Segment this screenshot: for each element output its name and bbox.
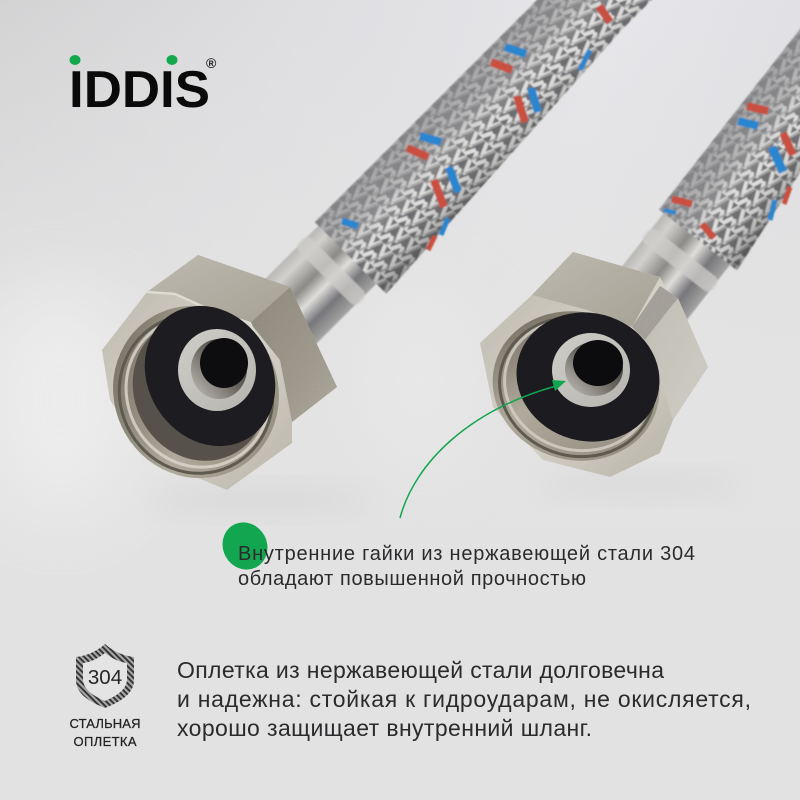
description text: хорошо защищает внутренний шланг. bbox=[177, 715, 592, 741]
steel ring bbox=[178, 329, 256, 411]
nut top face bbox=[147, 255, 290, 323]
callout text: обладают повышенной прочностью bbox=[238, 568, 586, 590]
description text bbox=[177, 657, 751, 741]
description text: Оплетка из нержавеющей стали долговечна bbox=[177, 657, 664, 683]
green dot marker bbox=[214, 514, 276, 578]
nut silhouette and front rim bbox=[480, 252, 708, 477]
nut thread opening bbox=[85, 278, 307, 506]
black gasket bbox=[119, 281, 301, 471]
photo: left braided hose bbox=[250, 0, 682, 359]
nut top face bbox=[532, 252, 660, 327]
logo: IDDIS: ® bbox=[206, 55, 217, 71]
callout text bbox=[238, 543, 695, 590]
nut side face bbox=[645, 298, 708, 420]
badge: 304 steel braid bbox=[70, 644, 140, 749]
photo: left nut bbox=[85, 255, 337, 506]
badge caption: СТАЛЬНАЯ bbox=[70, 716, 140, 731]
nut silhouette and front rim bbox=[102, 255, 337, 490]
badge caption bbox=[70, 716, 140, 749]
nut grainy facet bbox=[632, 286, 678, 340]
nut thread opening bbox=[476, 293, 676, 479]
black gasket bbox=[502, 297, 674, 457]
nut edge highlight bbox=[147, 292, 260, 345]
bore bbox=[191, 339, 247, 399]
photo: right braided hose bbox=[607, 0, 800, 337]
bore bbox=[565, 342, 623, 396]
callout text: Внутренние гайки из нержавеющей стали 304 bbox=[238, 543, 695, 565]
badge caption: ОПЛЕТКА bbox=[74, 734, 137, 749]
logo: IDDIS: IDDIS bbox=[69, 61, 210, 119]
nut side face bbox=[250, 287, 337, 422]
arrow: callout pointer bbox=[400, 380, 566, 518]
photo: right nut bbox=[476, 252, 708, 479]
icon: shield: 304 bbox=[88, 666, 122, 689]
steel ring bbox=[552, 333, 630, 407]
description text: и надежна: стойкая к гидроударам, не окисляется, bbox=[177, 686, 751, 712]
